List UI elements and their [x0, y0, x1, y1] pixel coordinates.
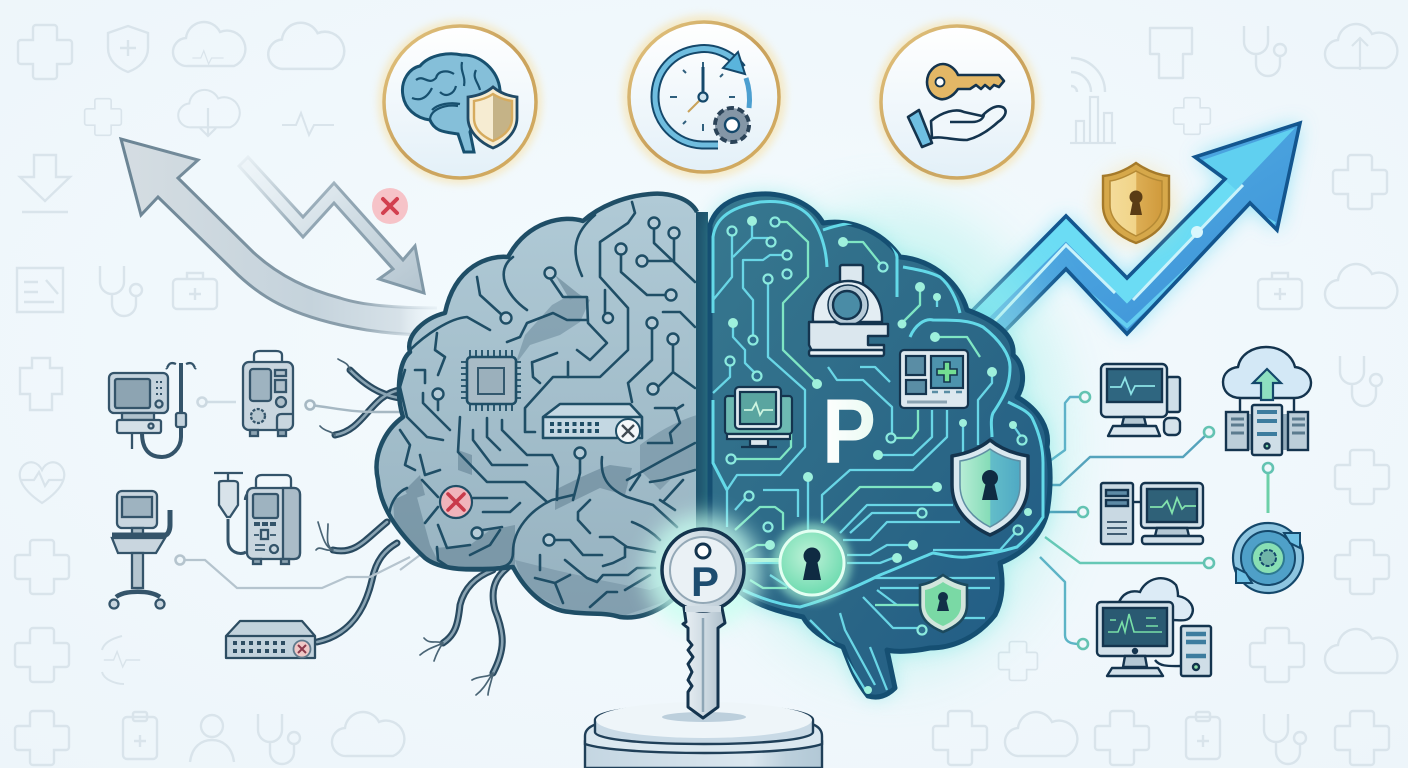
inner cyan contour [713, 201, 1043, 607]
device: IV pump with bag [214, 473, 300, 564]
icon badge: key over open hand [875, 20, 1039, 184]
wires and devices: right side [1040, 347, 1311, 676]
device: cart monitor [110, 491, 170, 608]
thin connector lines [202, 401, 236, 403]
arrow: gray zigzag down arrow [239, 157, 424, 293]
icon badge: clock with gear [622, 15, 786, 179]
device: cloud with upload over servers [1223, 347, 1311, 455]
icon: heartbeat monitor [725, 387, 792, 447]
device: infusion pump [243, 351, 293, 436]
glow behind right brain [710, 205, 1070, 675]
icon: microchip [461, 350, 521, 411]
device: tower and monitor [1101, 483, 1203, 544]
icon: sync gear [1233, 523, 1303, 593]
icon: large security shield [952, 440, 1028, 535]
center divide [696, 212, 708, 530]
key logo letter: P [691, 558, 719, 605]
icon: small shield [920, 575, 967, 632]
brain: damaged left hemisphere [377, 194, 697, 618]
logo: P mark: P [822, 381, 876, 483]
icon: gold shield with keyhole [1098, 163, 1174, 243]
teal connectors [1040, 397, 1268, 644]
cables running into brain [316, 359, 507, 695]
device: cloud monitor and tower [1097, 578, 1211, 676]
icon badge: brain and shield [378, 20, 542, 184]
icon: broken switch [543, 404, 642, 443]
icon: green keyhole node [745, 523, 852, 603]
key glow [645, 514, 761, 630]
device: network switch [226, 621, 315, 658]
pedestal [585, 702, 822, 768]
device: desktop monitor [1101, 364, 1180, 436]
icon: red x node [440, 486, 472, 518]
icon: medical panel [900, 350, 968, 408]
arrow: curved gray arrow pointing up-left [121, 139, 437, 335]
key with P logo [662, 529, 744, 718]
panel: declining gray arrows [121, 139, 437, 335]
cyan and green circuit traces [713, 222, 1022, 693]
icon: red x badge [372, 188, 408, 224]
circuit traces [389, 202, 695, 607]
dark damage patches [393, 275, 697, 617]
icon: MRI scanner [809, 265, 888, 356]
device: patient monitor on IV stand [109, 363, 196, 457]
wires and devices: left side [109, 351, 507, 695]
brain: healthy right hemisphere [710, 194, 1050, 697]
arrow: rising blue arrow [970, 123, 1300, 334]
